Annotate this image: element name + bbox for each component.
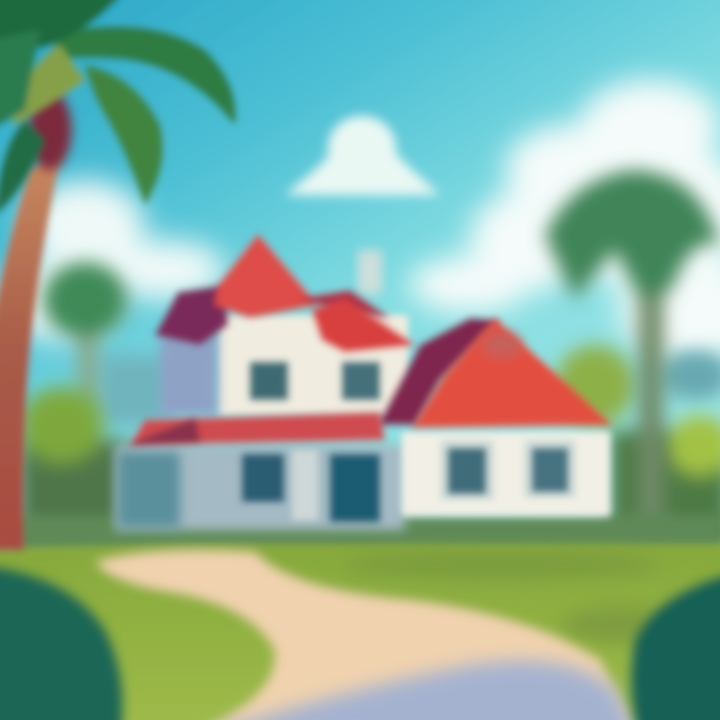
cloud: left xyxy=(0,180,225,340)
path shadow xyxy=(190,661,640,720)
roof: top gable dark xyxy=(155,285,228,345)
trunk xyxy=(0,150,62,550)
background palm: right xyxy=(545,170,720,530)
roof: mid red xyxy=(312,298,415,352)
roof: top gable red xyxy=(214,234,318,318)
chimney xyxy=(358,250,382,294)
path xyxy=(95,550,640,720)
foreground bush: left xyxy=(0,565,123,720)
left tower wall xyxy=(160,330,218,415)
ground floor right wall xyxy=(402,432,610,516)
roof: mid dark ridge xyxy=(300,290,390,318)
roof: right dark side xyxy=(378,318,500,425)
upper window left xyxy=(250,362,288,400)
upper window right xyxy=(342,362,380,400)
porch roof dark end xyxy=(128,418,200,445)
trunk top dark xyxy=(28,90,72,170)
ground window 1 frame xyxy=(440,440,494,500)
ground floor left wall xyxy=(115,445,405,530)
ground window 2 xyxy=(532,448,568,492)
lawn shade xyxy=(340,551,680,643)
foreground palm: left xyxy=(0,0,236,550)
upper wall xyxy=(218,315,408,415)
background palm: left xyxy=(43,262,127,410)
ground strip behind house xyxy=(20,515,720,555)
porch shadow left xyxy=(118,452,180,527)
front door xyxy=(330,454,380,522)
lawn xyxy=(0,544,720,720)
ground window 2 frame xyxy=(524,440,576,498)
porch column xyxy=(292,450,318,520)
porch roof xyxy=(130,412,385,445)
cloud: large right xyxy=(410,80,720,365)
house xyxy=(115,234,612,530)
cloud: small centre xyxy=(285,116,440,195)
fronds xyxy=(0,0,236,215)
distant hazy background xyxy=(100,350,720,425)
porch window xyxy=(242,454,284,502)
background bushes: left xyxy=(20,387,130,550)
roof: right highlight xyxy=(482,331,522,359)
foreground bush: right xyxy=(631,572,720,720)
ground window 1 xyxy=(448,448,486,494)
background bushes: right xyxy=(555,345,720,550)
roof: right red xyxy=(412,318,612,428)
